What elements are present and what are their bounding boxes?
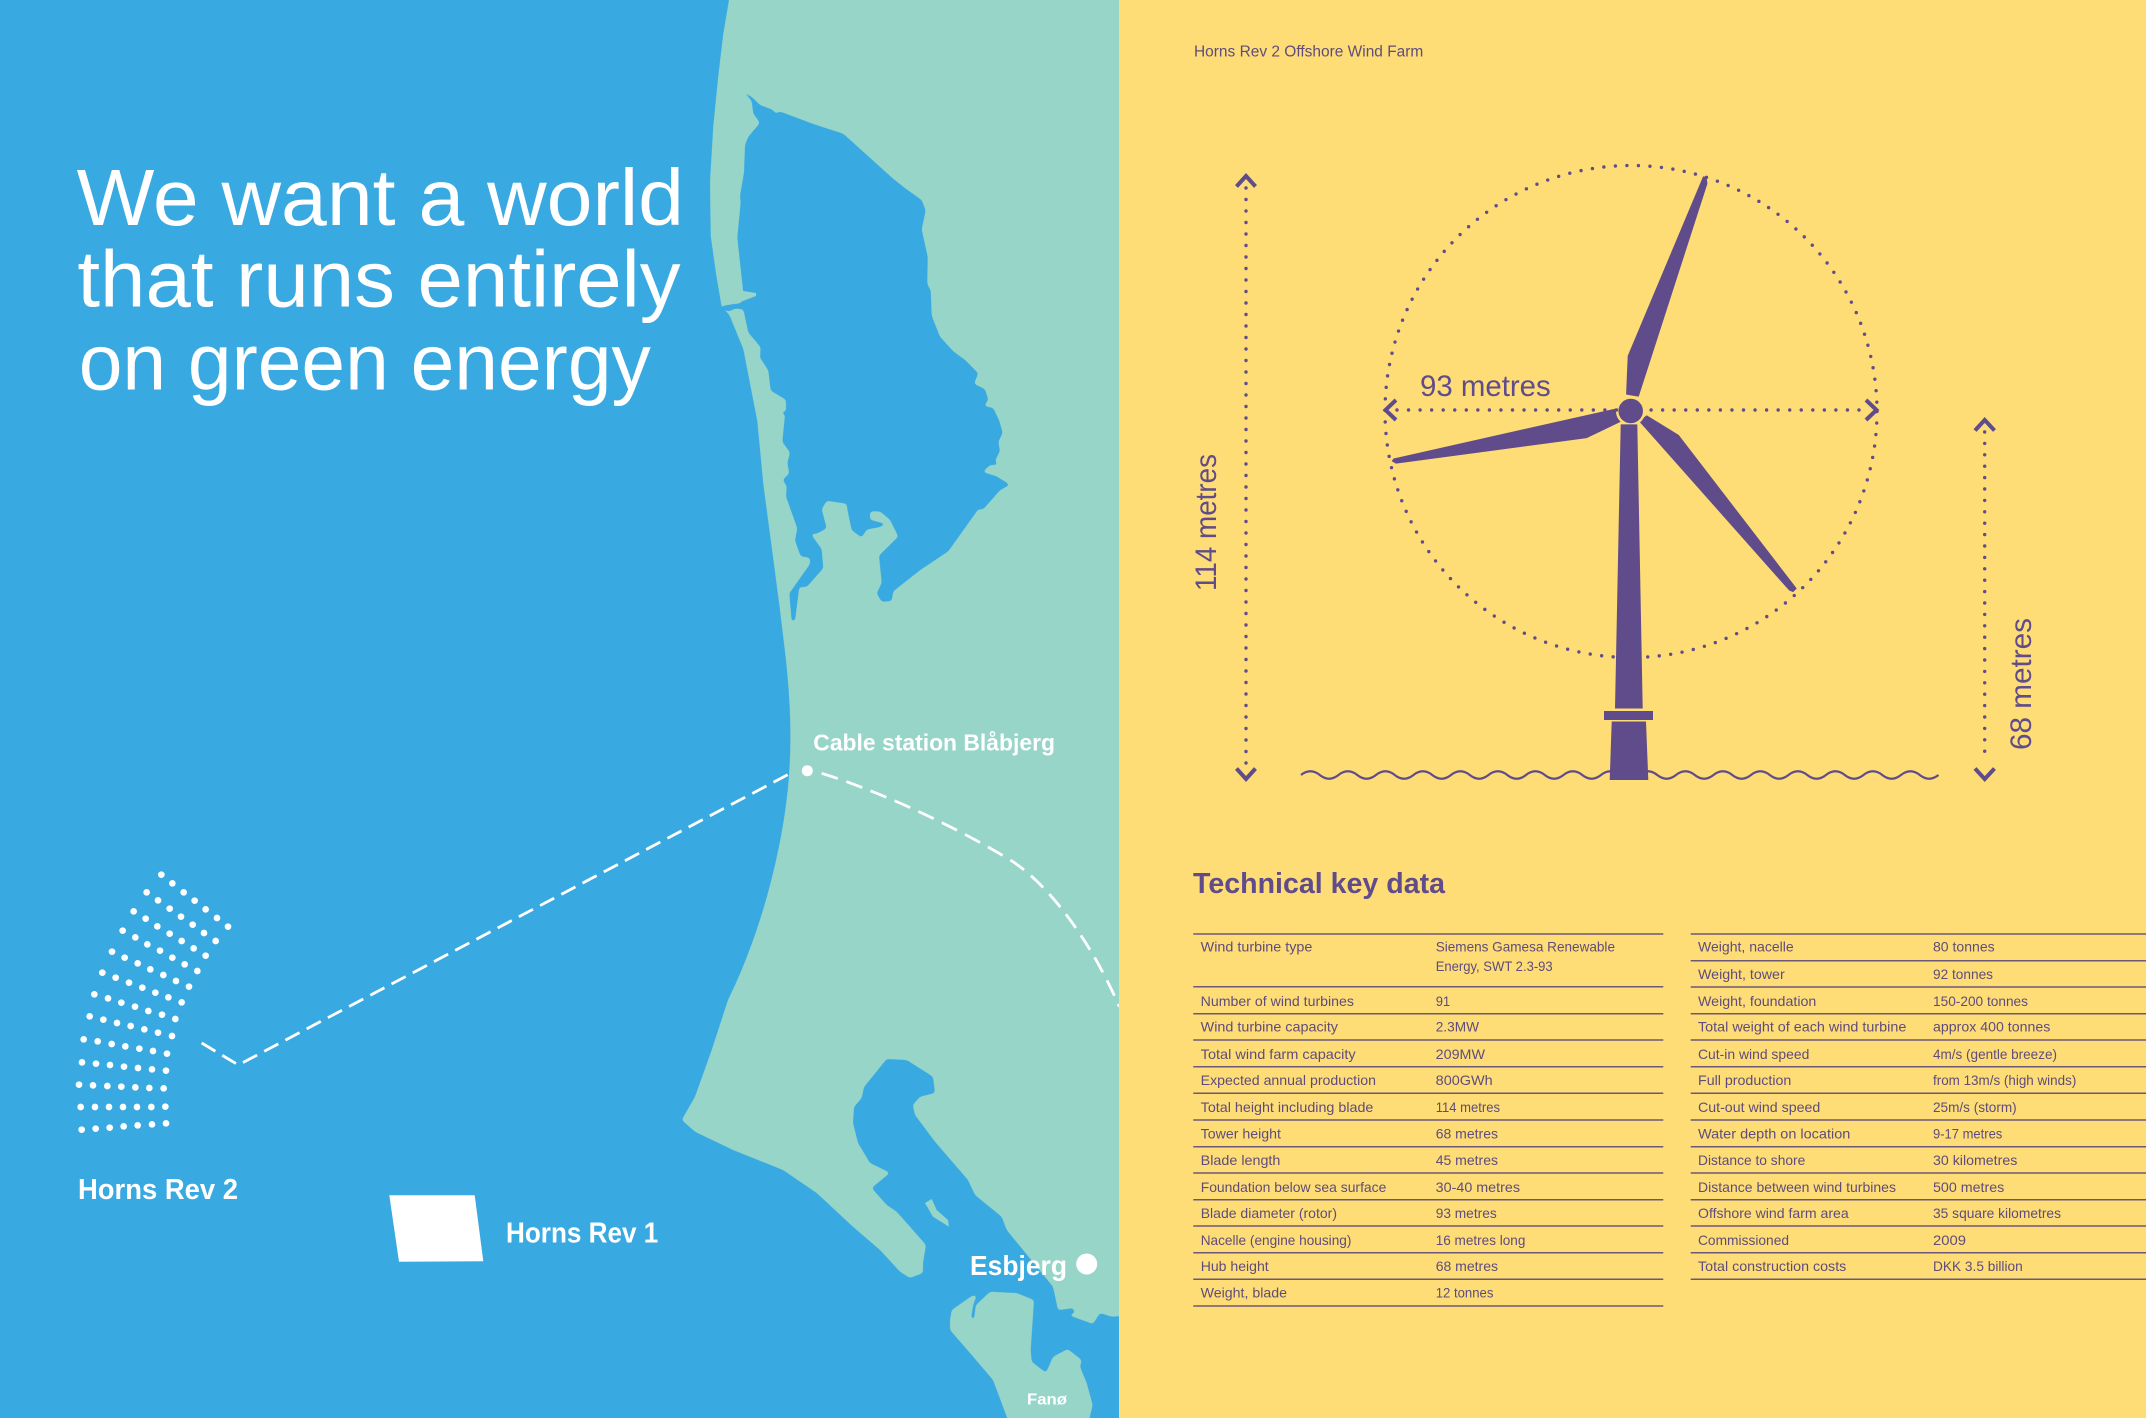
table: left column: 2.3MW <box>1436 1019 1480 1035</box>
map: export cable at sea <box>202 773 791 1065</box>
map: Esbjerg dot <box>1076 1254 1097 1274</box>
headline: We want a world <box>77 153 684 242</box>
map: Fano island <box>950 1292 1093 1418</box>
table: left column: Expected annual production <box>1201 1072 1376 1088</box>
table: right column: DKK 3.5 billion <box>1933 1258 2023 1274</box>
table: right column: Weight, foundation <box>1698 993 1816 1009</box>
turbine diagram <box>1301 166 1938 780</box>
table: left column: Blade diameter (rotor) <box>1201 1205 1337 1221</box>
table: right column: 9-17 metres <box>1933 1126 2002 1142</box>
label: Horns Rev 2: Horns Rev 2 <box>78 1174 238 1206</box>
page title: Horns Rev 2 Offshore Wind Farm <box>1194 44 1423 61</box>
table: left column: 16 metres long <box>1436 1232 1525 1248</box>
tower band <box>1604 711 1653 720</box>
table: left column: Foundation below sea surface <box>1201 1179 1387 1195</box>
table: left column: 68 metres <box>1436 1258 1498 1274</box>
table: left column: Total height including blade <box>1201 1099 1374 1115</box>
table: right column: from 13m/s (high winds) <box>1933 1072 2076 1088</box>
table: left column: 91 <box>1436 993 1450 1009</box>
table: right column: 25m/s (storm) <box>1933 1099 2017 1115</box>
foundation <box>1610 722 1648 780</box>
label: 93 metres: 93 metres <box>1420 370 1551 403</box>
blade right <box>1640 416 1796 592</box>
table: right column: Full production <box>1698 1072 1791 1088</box>
table: left column: Total wind farm capacity <box>1201 1046 1356 1062</box>
table: right column: Distance to shore <box>1698 1152 1806 1168</box>
label: Fano: Fanø <box>1027 1392 1067 1409</box>
table: right column: 80 tonnes <box>1933 939 1995 955</box>
table: left column: 45 metres <box>1436 1152 1498 1168</box>
table: right column: Weight, tower <box>1698 966 1785 982</box>
table: left column: Wind turbine type <box>1201 939 1313 955</box>
table: left column: Blade length <box>1201 1152 1280 1168</box>
dimension: total height arrow <box>1236 176 1256 779</box>
table: left column: Hub height <box>1201 1258 1269 1274</box>
table: left column <box>1193 934 1663 1306</box>
table: right column: Weight, nacelle <box>1698 939 1794 955</box>
blade left <box>1392 409 1620 463</box>
dimension: hub height arrow <box>1975 420 1994 779</box>
panel: technical yellow <box>1119 0 2146 1418</box>
table: left column: 114 metres <box>1436 1099 1500 1115</box>
headline: that runs entirely <box>77 235 681 324</box>
table: right column: Total weight of each wind turbine <box>1698 1019 1907 1035</box>
heading: technical key data: Technical key data <box>1193 868 1446 900</box>
label: cable station: Cable station Blåbjerg <box>813 730 1055 756</box>
water waves <box>1301 771 1938 779</box>
rotor circle <box>1385 166 1877 658</box>
table: left column: 93 metres <box>1436 1205 1497 1221</box>
table: right column: 150-200 tonnes <box>1933 993 2028 1009</box>
headline <box>77 153 684 406</box>
map: Horns Rev 1 area <box>389 1195 483 1262</box>
table: right column: Offshore wind farm area <box>1698 1205 1849 1221</box>
table: left column: Weight, blade <box>1201 1285 1287 1301</box>
map: cable station dot <box>802 765 813 776</box>
map: Horns Rev 2 turbine dots <box>76 871 231 1133</box>
table: right column: Commissioned <box>1698 1232 1789 1248</box>
table: left column: 209MW <box>1436 1046 1486 1062</box>
map: small island in Ho Bugt <box>925 1199 949 1227</box>
table: right column: approx 400 tonnes <box>1933 1019 2050 1035</box>
label: 68 metres: 68 metres <box>2005 618 2038 750</box>
table: left column: Siemens Gamesa Renewable <box>1436 939 1615 955</box>
table: right column: 30 kilometres <box>1933 1152 2017 1168</box>
table: right column: Total construction costs <box>1698 1258 1846 1274</box>
table: right column: 4m/s (gentle breeze) <box>1933 1046 2057 1062</box>
label: Esbjerg: Esbjerg <box>970 1250 1067 1281</box>
dimension: rotor diameter arrow <box>1386 400 1876 420</box>
label: Horns Rev 1: Horns Rev 1 <box>506 1217 658 1249</box>
table: left column: Tower height <box>1201 1126 1281 1142</box>
table: left column: 30-40 metres <box>1436 1179 1520 1195</box>
table: left column: Number of wind turbines <box>1201 993 1354 1009</box>
table: left column: 800GWh <box>1436 1072 1493 1088</box>
table: right column: 2009 <box>1933 1232 1966 1248</box>
map: cable on land <box>822 773 1119 1007</box>
map: mainland <box>682 0 1135 1324</box>
table: left column: 68 metres <box>1436 1126 1498 1142</box>
headline: on green energy <box>79 317 651 406</box>
hub <box>1617 398 1644 424</box>
table: right column: 500 metres <box>1933 1179 2004 1195</box>
map: Ringkobing fjord <box>720 87 1010 622</box>
table: right column: Distance between wind turbines <box>1698 1179 1896 1195</box>
map: fjord spit <box>733 291 756 304</box>
panel: map sea <box>0 0 1119 1418</box>
table: right column: Cut-in wind speed <box>1698 1046 1809 1062</box>
table: right column <box>1691 934 2146 1279</box>
label: 114 metres: 114 metres <box>1190 454 1223 591</box>
table: left column: Wind turbine capacity <box>1201 1019 1338 1035</box>
table: left column: 12 tonnes <box>1436 1285 1493 1301</box>
table: right column: Water depth on location <box>1698 1126 1850 1142</box>
blade up <box>1627 177 1707 396</box>
table: right column: 35 square kilometres <box>1933 1205 2061 1221</box>
table: left column: Energy, SWT 2.3-93 <box>1436 958 1553 974</box>
table: left column: Nacelle (engine housing) <box>1201 1232 1351 1248</box>
table: right column: Cut-out wind speed <box>1698 1099 1820 1115</box>
table: right column: 92 tonnes <box>1933 966 1993 982</box>
tower <box>1615 424 1643 708</box>
